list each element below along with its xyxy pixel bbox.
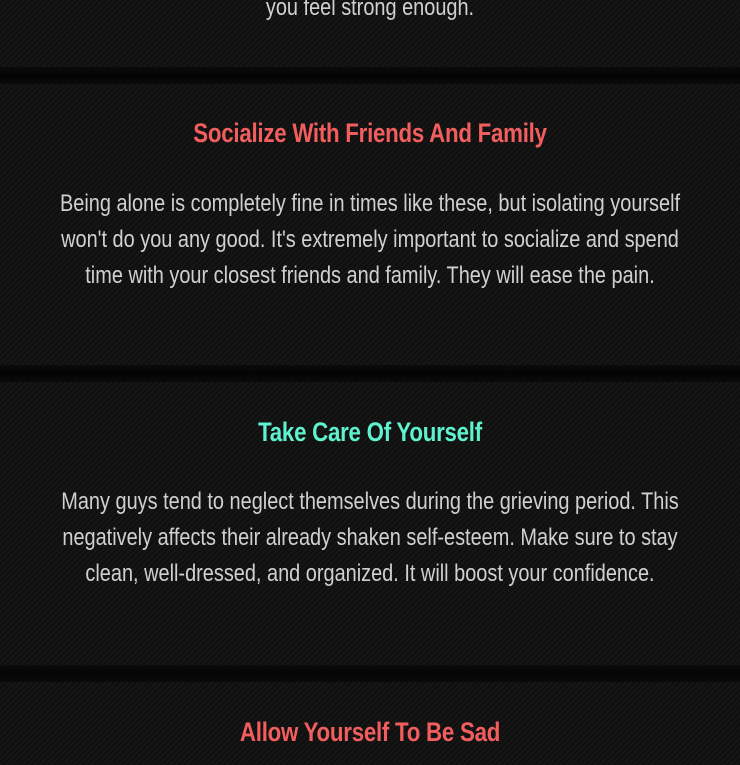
text block: socialize: time with your closest friends and family. They will ease the pain. [85,262,655,289]
panel: socialize [60,118,680,289]
text block: socialize [60,190,680,289]
text block: socialize: won't do you any good. It's extremely important to socialize and spend [61,226,679,253]
heading: sad: Allow Yourself To Be Sad [240,717,500,747]
text block: take care: clean, well-dressed, and organized. It will boost your confidence. [85,560,655,587]
text block: take care [61,488,679,587]
text block: socialize: Being alone is completely fine in times like these, but isolating yourself [60,190,680,217]
heading: take care: Take Care Of Yourself [258,417,482,447]
panel: take care [61,417,679,587]
text block: take care: Many guys tend to neglect themselves during the grieving period. This [61,488,679,515]
text block: take care: negatively affects their already shaken self-esteem. Make sure to stay [62,524,678,551]
heading: socialize: Socialize With Friends And Family [193,118,547,148]
